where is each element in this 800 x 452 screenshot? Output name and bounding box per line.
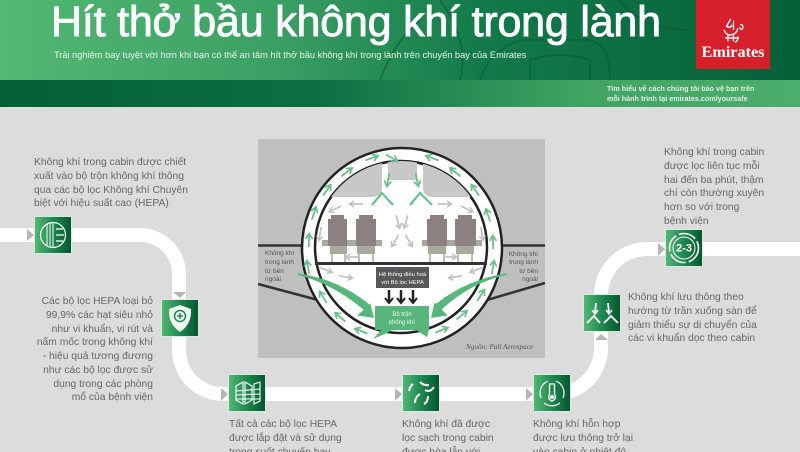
label: fresh air left: ngoài — [265, 276, 281, 283]
logo wordmark: Emirates — [702, 43, 764, 61]
text: step 2: 99,9% các hạt siêu nhỏ — [46, 310, 153, 321]
air mixer box: không khí — [389, 320, 415, 326]
icon: filter mesh — [228, 374, 266, 412]
air mixer box: Bộ trộn — [392, 312, 412, 318]
text: step 4: lọc sạch trong cabin — [402, 433, 494, 444]
cabin airflow arrows — [316, 172, 486, 281]
text: step 7: được lọc liên tục mỗi — [664, 161, 759, 172]
icon: calligraphy emblem — [723, 18, 744, 43]
seats — [322, 215, 482, 262]
text: step 1: xuất vào bộ trộn không khí thông — [34, 171, 184, 182]
air conditioning box: Hệ thống điều hoà — [379, 272, 427, 278]
text: step 6: các vi khuẩn dọc theo cabin — [628, 333, 755, 344]
ring airflow arrows — [303, 151, 498, 337]
icon: HEPA filter — [34, 216, 72, 254]
text: step 3: Tất cả các bộ lọc HEPA — [229, 419, 337, 430]
text: step 6: Không khí lưu thông theo — [628, 292, 744, 303]
logo: Emirates — [696, 0, 770, 69]
fresh air arrows — [298, 274, 507, 317]
text: step 7: Không khí trong cabin — [664, 147, 764, 158]
text: step 3 — [229, 419, 342, 452]
icon: 2-3 minutes: 2-3 — [676, 242, 692, 254]
text: step 5: được lưu thông trở lại — [533, 433, 633, 444]
text: step 2: mổ của bệnh viện — [72, 392, 153, 403]
label: fresh air right — [509, 251, 538, 283]
label: fresh air left: trong lành — [265, 259, 294, 266]
overhead bins — [331, 161, 471, 197]
text: step 7 — [664, 147, 764, 227]
icon: mixing air — [402, 374, 440, 412]
text: step 1: qua các bộ lọc Không khí Chuyên — [34, 184, 188, 196]
text: step 4 — [402, 419, 494, 452]
label: fresh air right: từ bên — [519, 268, 538, 275]
label: fresh air right: trong lành — [509, 259, 538, 266]
label: fresh air left: Không khí — [265, 250, 294, 257]
text: step 7: hơn so với trong — [664, 202, 739, 213]
icon: downward airflow — [584, 294, 620, 332]
cabin diagram panel — [258, 139, 546, 358]
link text — [607, 84, 754, 102]
text: step 6 — [628, 292, 757, 344]
source credit: Nguồn: Pall Aerospace — [465, 343, 534, 351]
text: step 7: hai đến ba phút, thậm — [664, 174, 764, 186]
text: step 6: giảm thiểu sự di chuyển của — [628, 320, 757, 330]
text: step 2: dụng trong các phòng — [53, 378, 153, 390]
text: step 5: Không khí hỗn hợp — [533, 419, 620, 430]
label: fresh air right: Không khí — [509, 251, 538, 258]
text: step 1: biệt với hiệu suất cao (HEPA) — [34, 198, 169, 209]
fuselage — [258, 148, 545, 348]
text: step 2 — [37, 296, 153, 403]
link text: Tìm hiểu về cách chúng tôi bảo vệ bạn trên — [607, 84, 754, 93]
panel background — [258, 139, 545, 358]
text: step 4: Không khí đã được — [402, 419, 490, 430]
icon: shield — [162, 300, 198, 336]
air conditioning box: với Bộ lọc HEPA — [381, 280, 424, 286]
header background — [0, 0, 800, 107]
label: fresh air right: ngoài — [522, 276, 538, 283]
text: step 2: - hiệu quả tương đương — [43, 351, 153, 362]
text: step 5 — [533, 418, 633, 452]
text: step 2: như vi khuẩn, vi rút và — [52, 324, 153, 334]
text: step 1 — [34, 157, 188, 209]
black arrows — [385, 290, 417, 303]
label: fresh air left: từ bên — [265, 268, 284, 275]
text: step 7: chí còn thường xuyên — [664, 188, 764, 199]
icon: 2-3 minutes — [666, 230, 702, 266]
text: step 1: Không khí trong cabin được chiết — [34, 157, 186, 168]
label: fresh air left — [265, 250, 294, 283]
text: step 2: nấm mốc trong không khí — [37, 337, 153, 348]
text: step 7: bệnh viện — [664, 216, 709, 227]
text: step 3: được lắp đặt và sử dụng — [229, 433, 342, 444]
text: step 2: Các bộ lọc HEPA loại bỏ — [42, 296, 153, 307]
icon: temperature cycle — [534, 374, 570, 412]
text: step 6: hướng từ trần xuống sàn để — [628, 306, 757, 317]
header banner — [0, 0, 800, 107]
air conditioning box — [376, 267, 429, 288]
link text: mỗi hành trình tại emirates.com/yoursafe — [607, 94, 748, 102]
subtitle: Trải nghiệm bay tuyệt vời hơn khi bạn có thể an tâm hít thở bầu không khí trong lành trên chuyến bay của Emirates — [54, 50, 526, 60]
text: step 2: như các bộ lọc được sử — [43, 365, 153, 376]
air mixer box — [373, 306, 429, 339]
